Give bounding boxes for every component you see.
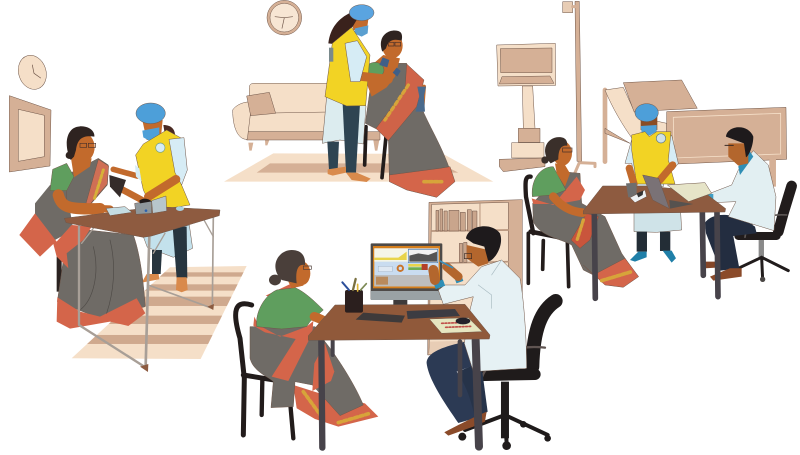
consultation table xyxy=(583,186,726,298)
scene: reviewing health dashboard on computer xyxy=(236,200,556,450)
seated woman from behind xyxy=(236,250,378,438)
blood pressure monitor xyxy=(106,196,184,216)
items on table: laptop, monitor, papers xyxy=(626,175,712,209)
striped rug xyxy=(67,266,253,359)
black office chair xyxy=(738,186,792,282)
nurse in yellow vest xyxy=(113,103,193,292)
icon: wall clock left xyxy=(14,52,51,93)
scene: blood pressure check at table xyxy=(9,52,253,372)
bookshelf xyxy=(428,200,522,355)
scene: clinic consultation with doctor xyxy=(497,1,792,298)
hospital bed xyxy=(605,80,787,187)
patterned floor rug xyxy=(224,153,493,182)
desktop monitor with dashboard xyxy=(371,243,442,311)
wooden chair legs xyxy=(365,127,386,178)
patient monitor on stand xyxy=(497,43,556,172)
standing nurse from behind xyxy=(322,5,388,182)
doctor in white coat xyxy=(689,127,776,281)
doctor with pen pointing at screen xyxy=(427,226,527,436)
seated woman in grey saree xyxy=(19,126,145,329)
IV drip pole xyxy=(563,1,595,175)
desk items: pen cup, keyboard, tablet, chart sheet xyxy=(342,279,482,333)
black office chair xyxy=(458,301,556,450)
sofa with cushion xyxy=(233,83,380,151)
office desk xyxy=(308,304,490,448)
nurse behind table xyxy=(625,104,682,263)
icon: wall clock centre xyxy=(267,0,302,35)
folding table xyxy=(64,207,220,372)
wall picture frame xyxy=(9,96,51,172)
seated woman with dumbbells xyxy=(365,31,455,197)
seated woman side view xyxy=(525,137,639,287)
scene: home exercise in living room xyxy=(224,0,493,197)
